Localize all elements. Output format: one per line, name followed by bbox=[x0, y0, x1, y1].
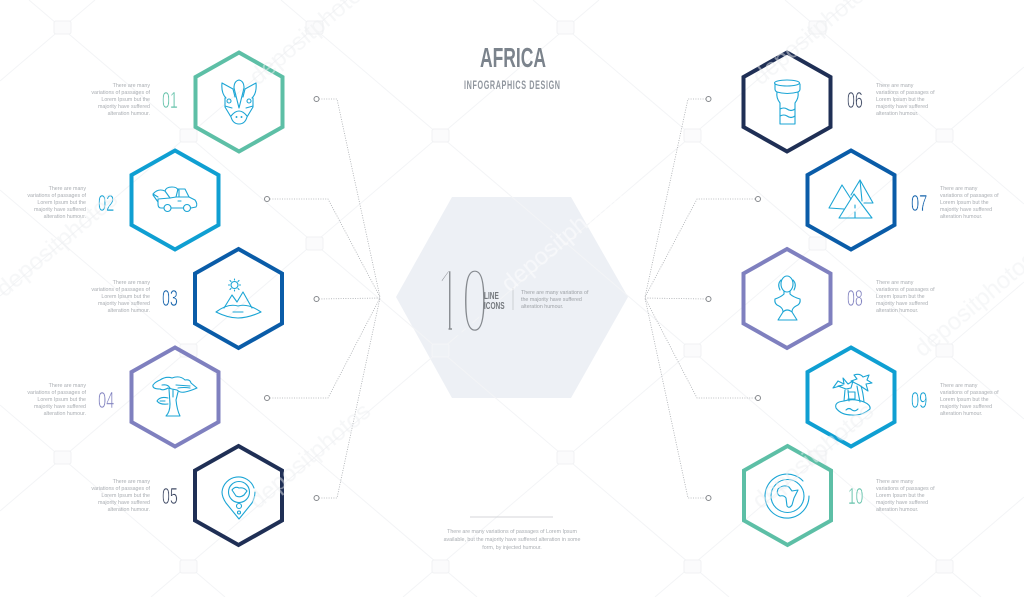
number 08: 08 bbox=[847, 287, 863, 312]
icon: map pin bbox=[222, 477, 255, 519]
connector 10 bbox=[645, 298, 711, 500]
icon: zebra bbox=[222, 80, 256, 124]
description 01: majority have suffered bbox=[98, 104, 150, 110]
description 07: variations of passages of bbox=[940, 193, 999, 199]
watermark text overlay: depositphotos bbox=[496, 181, 628, 298]
footer text: form, by injected humour. bbox=[482, 545, 542, 551]
description 02: Lorem Ipsum but the bbox=[37, 200, 86, 206]
description 09: alteration humour. bbox=[940, 411, 982, 417]
description 03: majority have suffered bbox=[98, 301, 150, 307]
title: AFRICA bbox=[480, 42, 546, 73]
hexagon 01 bbox=[196, 52, 282, 152]
icon: loaded car bbox=[153, 187, 197, 212]
step 08 bbox=[645, 249, 935, 348]
step 07 bbox=[645, 150, 999, 297]
step 10 bbox=[645, 298, 935, 545]
description 04: There are many bbox=[49, 383, 86, 389]
description 03: alteration humour. bbox=[108, 308, 150, 314]
hexagon 10 bbox=[744, 446, 831, 545]
description 08: alteration humour. bbox=[876, 308, 918, 314]
step 01 bbox=[91, 52, 380, 297]
description 03: There are many bbox=[113, 280, 150, 286]
description 06: Lorem Ipsum but the bbox=[876, 97, 925, 103]
number 03: 03 bbox=[162, 287, 178, 312]
description 01: Lorem Ipsum but the bbox=[101, 97, 150, 103]
description 02: variations of passages of bbox=[27, 193, 87, 199]
connector 03 bbox=[314, 296, 380, 302]
hexagon 04 bbox=[132, 348, 218, 446]
central hexagon content bbox=[436, 248, 589, 353]
description 09: variations of passages of bbox=[940, 390, 999, 396]
description 09: majority have suffered bbox=[940, 404, 992, 410]
icon: mountains and sun bbox=[216, 279, 261, 318]
step 05 bbox=[91, 298, 380, 545]
central hexagon background bbox=[396, 197, 628, 398]
hexagon 03 bbox=[195, 249, 282, 348]
icon: pyramids bbox=[829, 180, 873, 218]
description 06: alteration humour. bbox=[876, 111, 918, 117]
connector 04 bbox=[264, 298, 380, 400]
description 07: majority have suffered bbox=[940, 207, 992, 213]
footer rule and note bbox=[444, 517, 580, 551]
description 10: majority have suffered bbox=[876, 500, 928, 506]
number 01: 01 bbox=[162, 89, 178, 114]
number 07: 07 bbox=[911, 192, 927, 217]
description 08: majority have suffered bbox=[876, 301, 928, 307]
connector 06 bbox=[645, 96, 711, 297]
step 09 bbox=[645, 298, 999, 446]
description 10: Lorem Ipsum but the bbox=[876, 493, 925, 499]
hexagon 09 bbox=[808, 348, 894, 446]
hexagon 08 bbox=[744, 249, 830, 348]
description 01: There are many bbox=[113, 83, 150, 89]
description 05: majority have suffered bbox=[98, 500, 150, 506]
description 02: majority have suffered bbox=[34, 207, 86, 213]
big number 10: 10 bbox=[436, 248, 488, 353]
connector 07 bbox=[645, 196, 760, 297]
description 09: Lorem Ipsum but the bbox=[940, 397, 989, 403]
step 06 bbox=[645, 52, 935, 297]
description 05: variations of passages of bbox=[91, 486, 151, 492]
description 05: There are many bbox=[113, 479, 150, 485]
number 05: 05 bbox=[162, 485, 178, 510]
description 10: There are many bbox=[876, 479, 914, 485]
description 09: There are many bbox=[940, 383, 978, 389]
central description: the majority have suffered bbox=[521, 297, 582, 303]
number 02: 02 bbox=[98, 192, 114, 217]
connector 02 bbox=[264, 196, 380, 297]
hexagon 06 bbox=[744, 52, 830, 152]
description 08: variations of passages of bbox=[876, 287, 935, 293]
line icons label: LINE bbox=[484, 289, 499, 301]
number 06: 06 bbox=[847, 89, 863, 114]
description 07: alteration humour. bbox=[940, 214, 982, 220]
description 08: There are many bbox=[876, 280, 914, 286]
description 05: alteration humour. bbox=[108, 507, 150, 513]
description 08: Lorem Ipsum but the bbox=[876, 294, 925, 300]
number 09: 09 bbox=[911, 389, 927, 414]
description 07: Lorem Ipsum but the bbox=[940, 200, 989, 206]
description 04: alteration humour. bbox=[44, 411, 86, 417]
hexagon 05 bbox=[195, 446, 282, 545]
central description: alteration humour. bbox=[521, 304, 563, 310]
description 10: variations of passages of bbox=[876, 486, 935, 492]
description 04: Lorem Ipsum but the bbox=[37, 397, 86, 403]
description 06: variations of passages of bbox=[876, 90, 935, 96]
footer text: available, but the majority have suffered alteration in some bbox=[444, 537, 580, 543]
connector 08 bbox=[645, 296, 711, 302]
line icons label bbox=[484, 289, 505, 311]
central description: There are many variations of bbox=[521, 290, 589, 296]
footer text: There are many variations of passages of Lorem Ipsum bbox=[447, 529, 578, 535]
description 01: variations of passages of bbox=[91, 90, 151, 96]
icon: africa coin bbox=[765, 474, 809, 518]
icon: djembe drum bbox=[774, 80, 800, 124]
icon: acacia tree bbox=[153, 377, 197, 416]
description 04: variations of passages of bbox=[27, 390, 87, 396]
description 01: alteration humour. bbox=[108, 111, 150, 117]
number 04: 04 bbox=[98, 389, 115, 414]
description 04: majority have suffered bbox=[34, 404, 86, 410]
subtitle: INFOGRAPHICS DESIGN bbox=[464, 79, 560, 93]
connector 05 bbox=[314, 298, 380, 500]
watermark text overlay: depositphotos bbox=[747, 398, 879, 515]
watermark text overlay: depositphotos bbox=[244, 398, 376, 515]
hexagon 02 bbox=[132, 150, 218, 250]
description 06: There are many bbox=[876, 83, 914, 89]
description 02: There are many bbox=[49, 186, 86, 192]
step 02 bbox=[27, 150, 380, 297]
connector 01 bbox=[314, 96, 380, 297]
central divider bbox=[512, 288, 514, 310]
description 05: Lorem Ipsum but the bbox=[101, 493, 150, 499]
icon: bust sculpture bbox=[775, 276, 800, 320]
description 03: variations of passages of bbox=[91, 287, 151, 293]
number 10: 10 bbox=[848, 485, 863, 510]
description 10: alteration humour. bbox=[876, 507, 918, 513]
step 03 bbox=[91, 249, 380, 348]
description 03: Lorem Ipsum but the bbox=[101, 294, 150, 300]
description 07: There are many bbox=[940, 186, 978, 192]
connector 09 bbox=[645, 298, 760, 400]
hexagon 07 bbox=[808, 150, 894, 250]
line icons label: ICONS bbox=[484, 299, 505, 311]
icon: palm island bbox=[833, 374, 872, 415]
step 04 bbox=[27, 298, 380, 446]
description 02: alteration humour. bbox=[44, 214, 86, 220]
description 06: majority have suffered bbox=[876, 104, 928, 110]
